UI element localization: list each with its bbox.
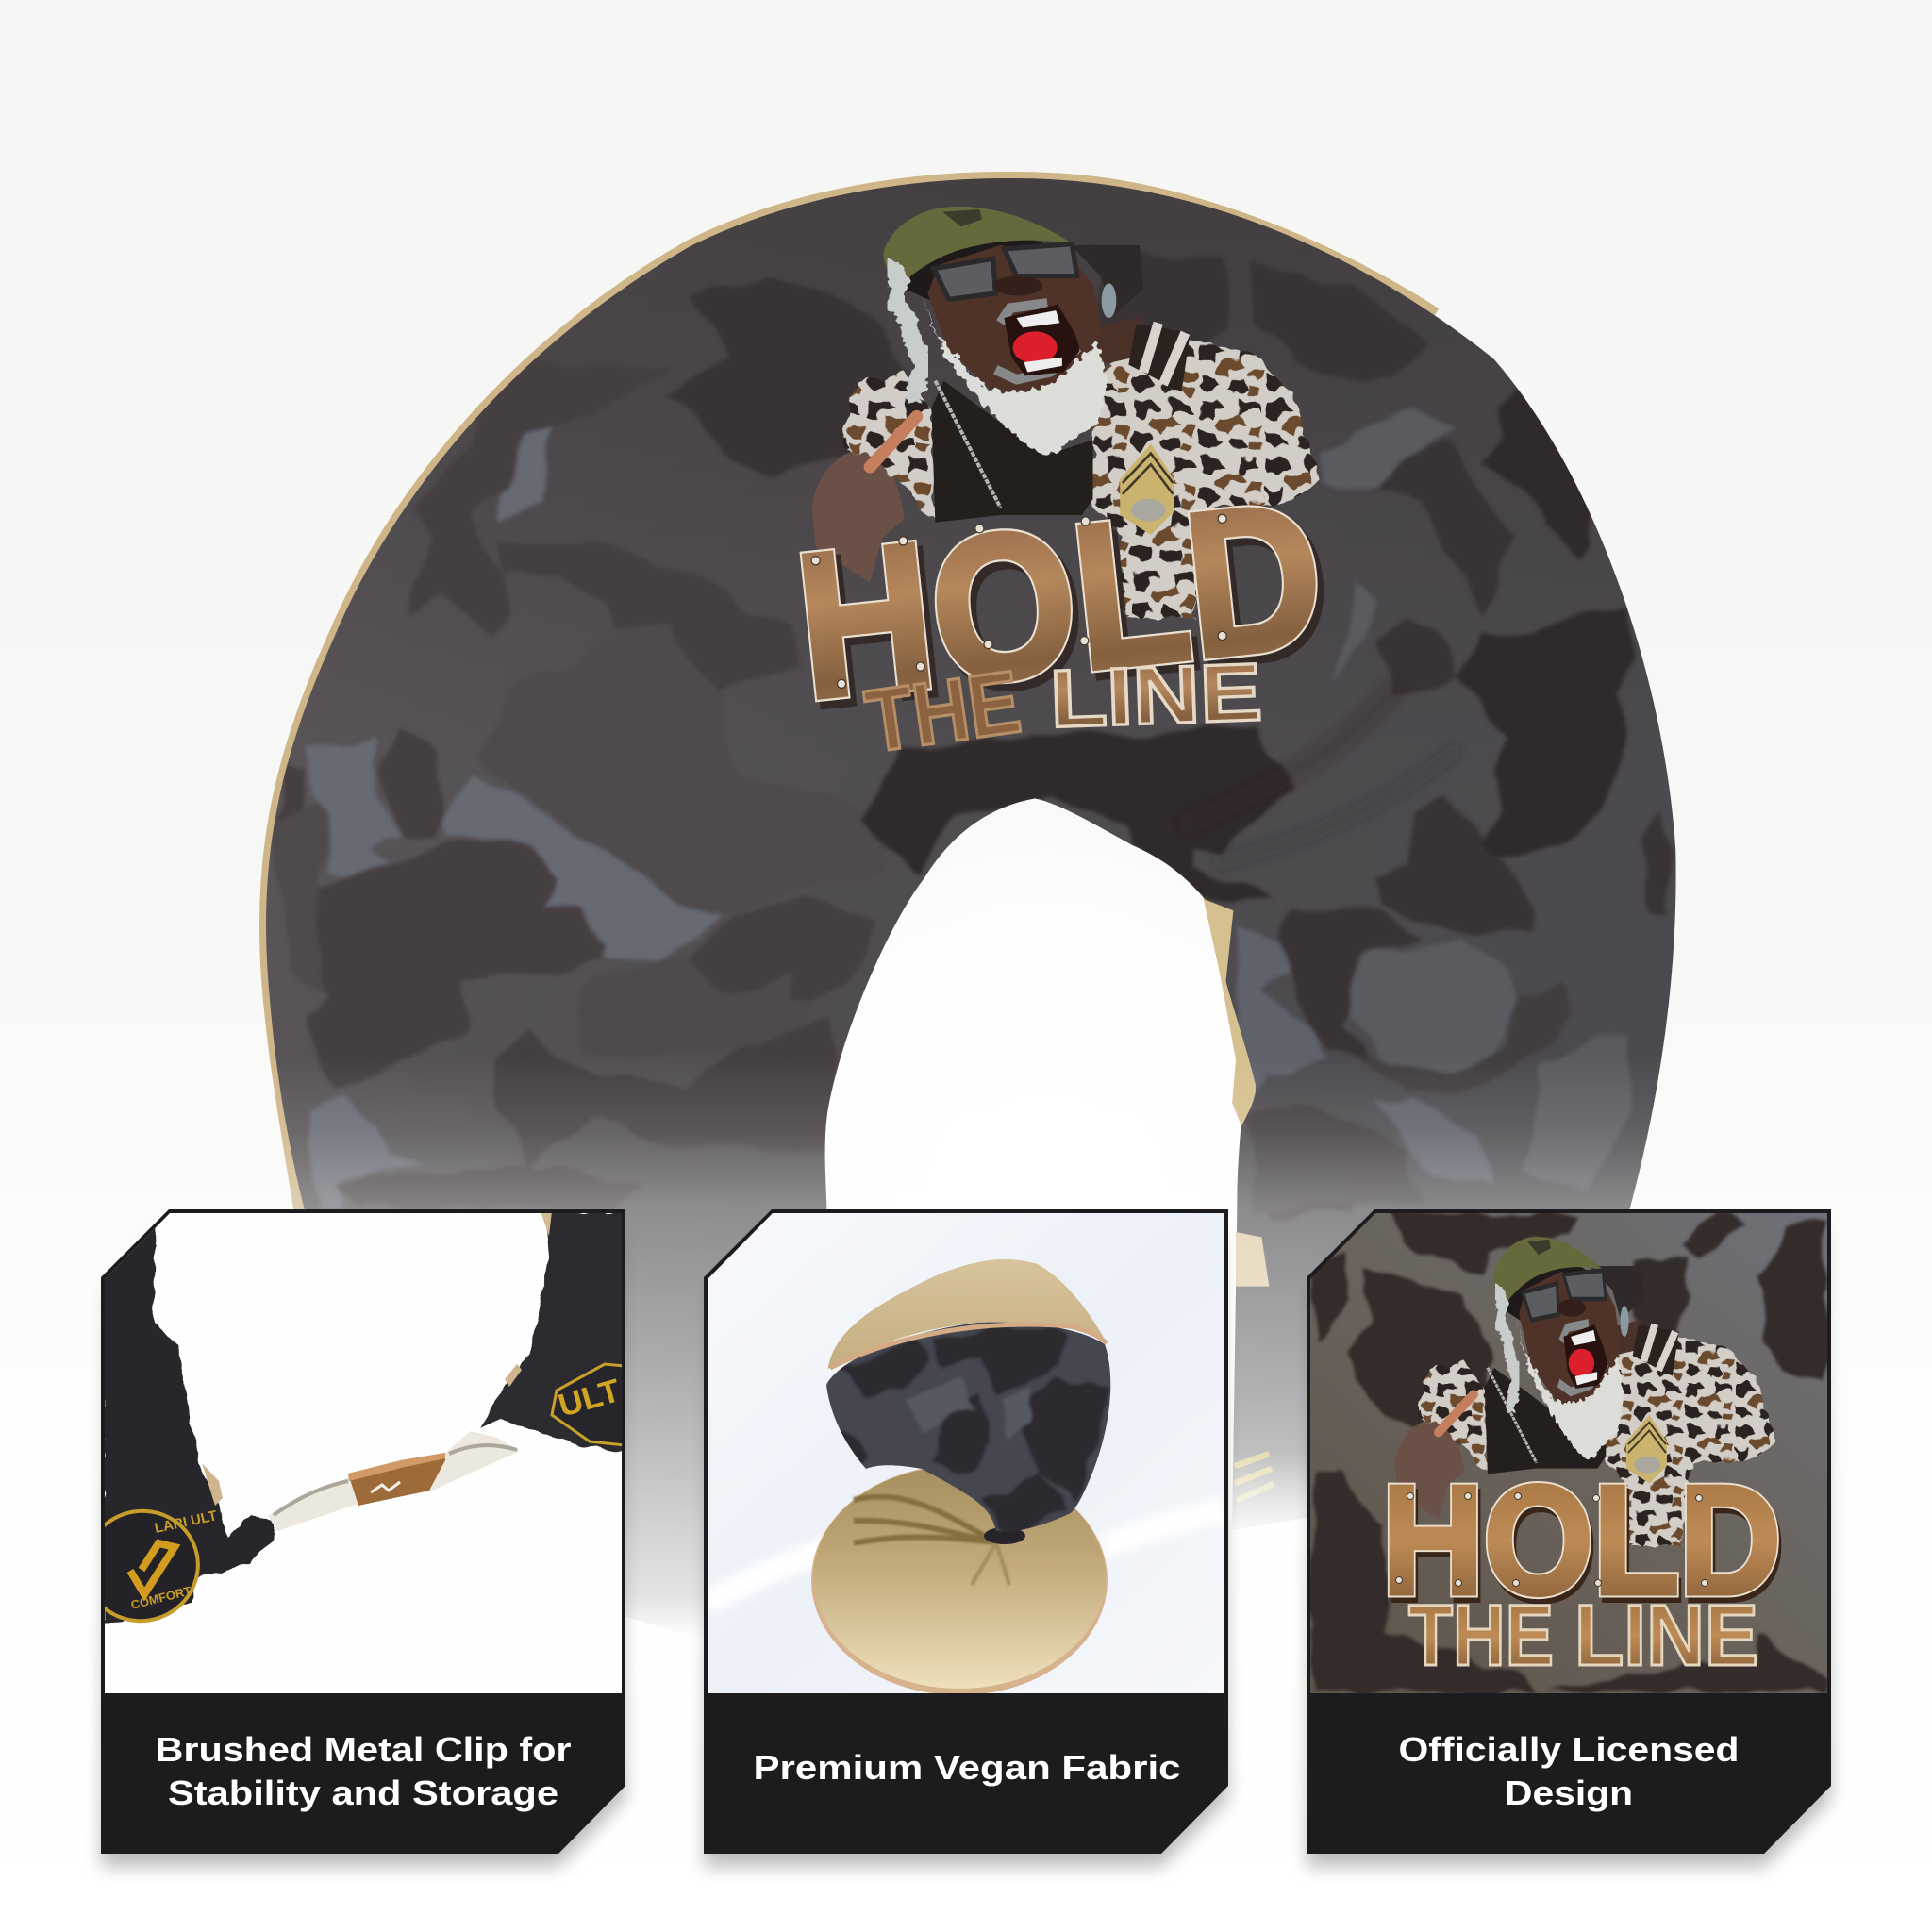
fold shadows: [1189, 690, 1454, 862]
caption: Officially Licensed: [1398, 1730, 1740, 1769]
caption: Design: [1505, 1774, 1633, 1812]
emblem: round gold badge: [105, 1509, 216, 1623]
mascot artwork: [1395, 1237, 1775, 1546]
caption: [155, 1730, 572, 1812]
mascot artwork: [812, 207, 1319, 619]
logo wordmark: HOLD: HOLD: [1382, 1454, 1781, 1626]
logo wordmark: HOLD: HOLD: [788, 459, 1332, 742]
caption: Brushed Metal Clip for: [155, 1730, 572, 1769]
mid tone areas: [271, 689, 648, 1049]
panel: brushed metal clip: [71, 1208, 632, 1854]
emblem: round gold badge: COMFORT: [129, 1583, 193, 1612]
gap fade between cards: [1228, 1453, 1307, 1538]
photo: logo close-up: [1302, 1208, 1840, 1698]
card shadows: [101, 1230, 1831, 1867]
metal clip: [348, 1453, 445, 1506]
logo rivets: [811, 514, 1226, 688]
lower tan donut: [811, 1465, 1108, 1695]
photo: folded pillow: [698, 1208, 1236, 1698]
left pillow end: [101, 1223, 274, 1624]
panel: premium vegan fabric: [698, 1208, 1236, 1854]
logo wordmark: LINE: LINE: [1048, 647, 1263, 745]
logo rivets: [1396, 1492, 1707, 1587]
logo wordmark: THE: THE: [859, 652, 1026, 771]
logo wordmark: THE LINE: [1408, 1588, 1758, 1684]
logo wordmark: HOLD: HOLD: [788, 459, 1332, 742]
logo wordmark: THE LINE: LINE: [1574, 1588, 1758, 1684]
caption: Premium Vegan Fabric: [753, 1748, 1181, 1787]
tan inner lining: [1203, 897, 1256, 1126]
tan piping edge: [266, 178, 1436, 1232]
panel: officially licensed design: [1302, 1208, 1840, 1854]
dark areas: [285, 363, 877, 1208]
pillow body: [246, 160, 1700, 1663]
emblem: round gold badge: LARI ULT: [153, 1507, 219, 1537]
top tan cap: [828, 1259, 1105, 1369]
cream strap: [268, 1431, 520, 1531]
camo section: [826, 1323, 1110, 1538]
blue-grey lights: [302, 400, 731, 1204]
logo wordmark: HOLD: HOLD: [793, 466, 1338, 749]
emblem: gold shield: [552, 1364, 625, 1445]
emblem: gold shield: ULT: [555, 1373, 625, 1424]
main product: camo neck pillow: [246, 160, 1700, 1663]
logo wordmark: HOLD: HOLD: [1382, 1454, 1781, 1626]
photo: clip detail: [71, 1208, 632, 1698]
logo wordmark: THE LINE: THE: [1408, 1588, 1554, 1684]
logo wordmark: HOLD: [800, 505, 1324, 709]
caption: Stability and Storage: [168, 1774, 558, 1812]
camo pattern: [276, 246, 1677, 1214]
right pillow end: [480, 1211, 625, 1451]
caption: [1398, 1730, 1740, 1812]
lower-right tan fold and gold badge: [1235, 1232, 1274, 1501]
logo wordmark: HOLD: HOLD: [1385, 1459, 1784, 1632]
